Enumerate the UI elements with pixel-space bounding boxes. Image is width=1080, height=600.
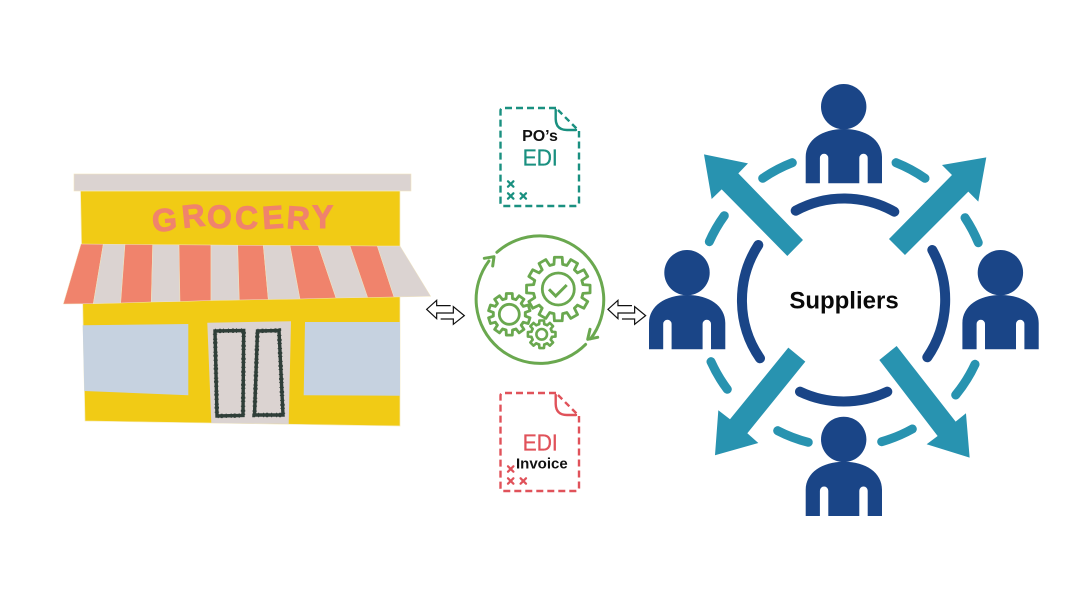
suppliers network: [649, 84, 1039, 516]
store building: [80, 191, 400, 426]
store roof: [74, 174, 411, 191]
large gear with check: [527, 257, 590, 321]
grocery store: [63, 174, 431, 426]
x marks: [508, 466, 526, 484]
supplier: left: [649, 250, 725, 349]
right window: [304, 322, 400, 396]
dashed page outline: [500, 393, 579, 491]
left gear: [488, 294, 531, 335]
document: EDI Invoice: [500, 393, 579, 491]
dashed page outline: [500, 108, 579, 206]
Suppliers label: Suppliers: [789, 288, 899, 314]
circular arrows: [476, 236, 604, 363]
supplier: right: [962, 250, 1039, 349]
store sign: GROCERY: GROCERY: [150, 197, 333, 239]
document: PO's EDI: [500, 108, 579, 206]
x marks: [508, 181, 526, 199]
left window: [83, 324, 188, 395]
EDI label: EDI: [523, 145, 558, 171]
supplier: top: [806, 84, 882, 183]
striped awning: [63, 244, 431, 304]
double arrow: process to suppliers: [608, 300, 646, 324]
store door: [207, 321, 291, 424]
small gear: [528, 320, 556, 348]
double arrow: store to process: [427, 300, 464, 324]
process gears icon: [476, 236, 604, 363]
inner ring arcs: [742, 198, 945, 402]
supplier: bottom: [806, 417, 882, 516]
EDI label: EDI: [523, 430, 558, 456]
Invoice label: Invoice: [516, 455, 568, 472]
outward arrows: [704, 154, 986, 458]
PO's label: PO’s: [522, 128, 558, 145]
outer ring dashes: [709, 163, 978, 442]
